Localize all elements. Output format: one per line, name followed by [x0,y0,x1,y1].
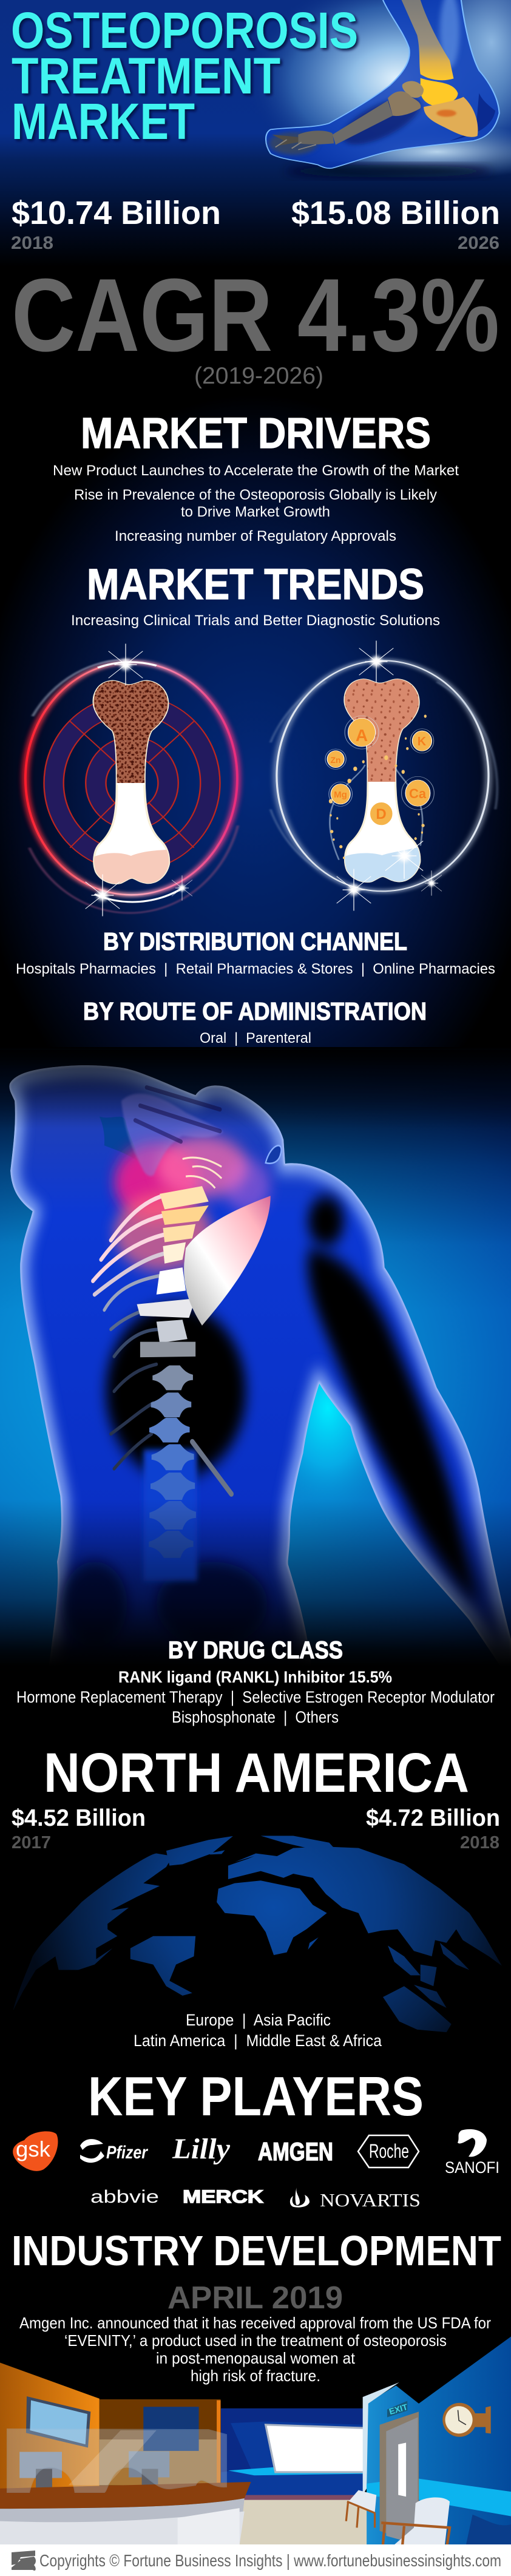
north america heading: NORTH AMERICA [44,1742,469,1804]
title: MARKET [12,93,195,150]
vitamin labels: A [356,726,368,745]
vitamin labels: Zn [330,755,341,765]
market drivers: Rise in Prevalence of the Osteoporosis Globally is Likely [74,487,437,503]
market drivers: to Drive Market Growth [181,504,330,520]
by distribution channel: BY DISTRIBUTION CHANNEL [103,927,407,955]
logo: Sanofi: SANOFI [445,2158,499,2177]
market size 2018 [11,195,221,253]
market drivers: MARKET DRIVERS [81,410,431,458]
by drug class heading: BY DRUG CLASS [168,1637,343,1664]
vitamin labels: Ca [409,786,427,801]
by route of administration [83,997,427,1046]
background: header [0,0,511,267]
logo: gsk [13,2131,58,2171]
logo: Sanofi [445,2129,499,2177]
background: middle band [0,395,511,1056]
market size 2018: $10.74 Billion [12,195,221,231]
logo: Pfizer: Pfizer [106,2143,149,2163]
illustration: weak bone [25,660,238,913]
other regions: Latin America | Middle East & Africa [134,2032,382,2050]
market trends: MARKET TRENDS [87,561,424,609]
other regions [134,2011,382,2050]
illustration: globe map [13,1836,502,2032]
logo: Roche: Roche [369,2140,409,2162]
logo: Amgen: AMGEN [258,2137,333,2166]
market size 2018: 2018 [11,233,53,253]
market size 2026: $15.08 Billion [291,195,500,231]
footer [0,2544,511,2576]
by route of administration: Oral | Parenteral [200,1030,311,1046]
market drivers: New Product Launches to Accelerate the Growth of the Market [53,463,459,479]
title: TREATMENT [12,47,280,104]
by route of administration: BY ROUTE OF ADMINISTRATION [83,997,427,1025]
logo: abbvie: abbvie [90,2187,159,2207]
date: APRIL 2019 [168,2280,343,2316]
drug class list: Bisphosphonate | Others [172,1708,339,1726]
anatomy panel top shade [0,1050,511,1129]
background: anatomy panel [0,1047,511,1666]
development description: high risk of fracture. [191,2367,320,2385]
sparkles [86,641,442,916]
market trends [71,561,440,629]
market trends: Increasing Clinical Trials and Better Diagnostic Solutions [71,612,440,629]
vitamin labels: Mg [334,790,347,800]
illustration: hospital reception [0,2336,511,2544]
logo: Novartis: NOVARTIS [320,2189,421,2211]
market drivers: Increasing number of Regulatory Approvals [115,528,396,544]
north america 2017: $4.52 Billion [12,1805,146,1831]
logo: gsk: gsk [16,2137,51,2161]
logo: Pfizer [80,2139,149,2163]
north america 2018: $4.72 Billion [366,1805,500,1831]
logo: Novartis [290,2186,421,2211]
drug class list [16,1668,495,1726]
north america 2017 [12,1805,146,1852]
market size 2026: 2026 [458,233,499,253]
development description [19,2314,491,2385]
other regions: Europe | Asia Pacific [186,2011,331,2029]
illustration: healthy bone with nutrients [271,660,497,891]
vitamin labels [330,726,427,822]
development description: in post-menopausal women at [156,2349,356,2367]
by distribution channel [16,927,495,977]
logo: Roche [358,2135,419,2168]
north america 2018: 2018 [460,1833,499,1852]
north america 2018 [366,1805,500,1852]
illustration: foot skeleton [266,0,499,168]
CAGR: (2019-2026) [194,363,323,389]
market size 2026 [291,195,500,253]
anatomy panel fade [0,1499,511,1700]
drug class list: RANK ligand (RANKL) Inhibitor 15.5% [118,1668,392,1686]
illustration: hospital reception: EXIT [388,2402,409,2416]
title [11,2,358,150]
illustration: male back with spine [9,1065,511,1682]
development description: ‘EVENITY,’ a product used in the treatment of osteoporosis [64,2331,447,2350]
title: OSTEOPOROSIS [11,2,358,59]
north america 2017: 2017 [12,1833,51,1852]
key players heading: KEY PLAYERS [88,2066,424,2127]
logo: Lilly: Lilly [172,2133,231,2165]
by distribution channel: Hospitals Pharmacies | Retail Pharmacies & Stores | Online Pharmacies [16,961,495,977]
vitamin labels: D [376,806,387,822]
logo: Merck: MERCK [183,2187,263,2207]
vitamin labels: K [418,735,427,748]
market drivers [53,410,459,544]
